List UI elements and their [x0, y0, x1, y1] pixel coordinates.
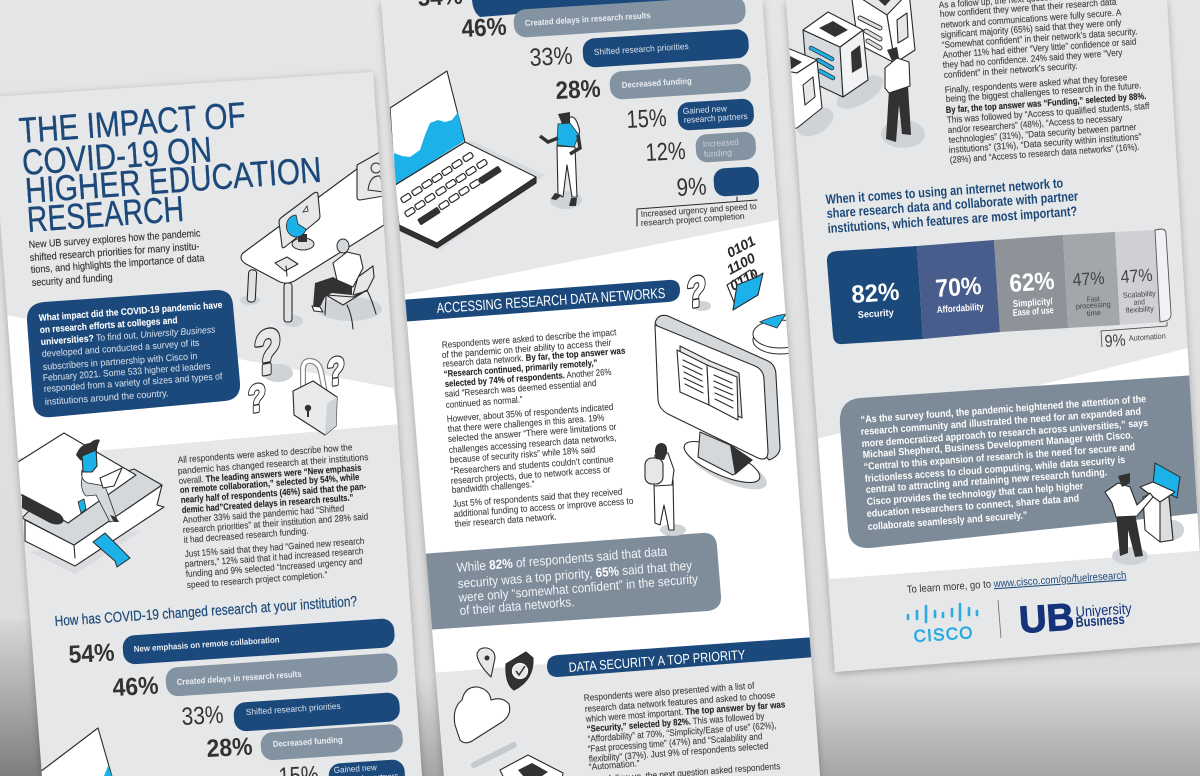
text: follow up and challenges — [938, 0, 1150, 165]
icons: pin, shield, cloud, chip — [454, 648, 563, 776]
text: survey results: demic had”Created delays in research results.” — [181, 492, 354, 515]
intro callout box — [27, 290, 240, 417]
illustration: server boxes and man — [780, 0, 925, 148]
quote panel: Cisco provides the technology that can help higher — [866, 481, 1084, 508]
text: follow up and challenges: Another 11% had either “Very little” confidence or said — [942, 36, 1137, 60]
icon: question marks: ? — [248, 376, 266, 422]
icon: question marks: ? — [254, 315, 281, 390]
stacked bar chart: network features: flexibility — [1126, 304, 1154, 315]
text: survey results: on remote collaboration,” selected by 54%, while — [179, 472, 360, 495]
text: data security body: “Affordability” at 70%, “Simplicity/Ease of use” (62%), — [587, 720, 777, 744]
intro callout box: responded from a variety of sizes and types of — [43, 370, 223, 394]
icon: question marks: ? — [327, 349, 345, 395]
bar chart: research changes: 46% — [112, 672, 159, 702]
panel: page 3 — [780, 0, 1200, 672]
stacked bar chart: network features: Ease of use — [1012, 305, 1054, 319]
text: follow up and challenges: This was followed by “Access to qualified students, staff — [946, 101, 1150, 125]
text: follow up and challenges: confident” in their network’s security. — [943, 61, 1078, 80]
text: survey results: research priorities” at their institution and 28% said — [182, 511, 369, 535]
text: accessing networks body: bandwidth challenges.” — [451, 479, 535, 495]
logo: University Business: University — [1075, 600, 1133, 621]
bar chart continued: research changes: 28% — [555, 75, 601, 105]
illustration: laptop with chart — [390, 71, 545, 250]
stacked bar chart: network features: Security — [857, 307, 895, 321]
logo: University Business: UB — [1018, 596, 1075, 642]
text: survey results: nearly half of respondents (46%) said that the pan- — [180, 481, 367, 505]
quote panel: education researchers to connect, share data and — [866, 493, 1080, 520]
intro callout box: subscribers in partnership with Cisco in — [42, 350, 198, 372]
text: follow up and challenges: technologies” (31%), “Data security between partner — [948, 122, 1137, 145]
subtitle text: tions, and highlights the importance of data — [30, 253, 205, 276]
title: HIGHER EDUCATION — [24, 149, 323, 211]
text: survey results — [177, 442, 369, 590]
text: accessing networks body: Just 5% of respondents said that they received — [452, 487, 623, 509]
text: data security body: “Automation.” — [588, 758, 640, 772]
stacked bar chart: network features: Affordability — [936, 302, 985, 316]
bar chart continued: research changes: funding — [703, 147, 732, 159]
illustration: book with seated woman — [18, 433, 164, 574]
bar chart continued: research changes: Gained new — [682, 103, 728, 116]
quote panel: central to attracting and retaining new research funding. — [865, 467, 1108, 496]
intro callout box: February 2021. Some 533 higher ed leaders — [42, 360, 211, 383]
subtitle text: New UB survey explores how the pandemic — [28, 228, 201, 251]
bar chart continued: research changes: 15% — [626, 104, 667, 134]
stacked bar chart: network features: Simplicity/ — [1012, 296, 1053, 310]
bar chart: research changes: Shifted research priorities — [245, 701, 341, 717]
icon: back server — [851, 0, 915, 63]
quote panel: collaborate seamlessly and securely.” — [867, 510, 1028, 533]
intro callout box: What impact did the COVID-19 pandemic have — [38, 299, 223, 323]
icon: question marks — [248, 327, 344, 414]
quote panel: Michael Shepherd, Business Development Manager with Cisco. — [862, 430, 1134, 461]
callout: data security stat: of their data networks. — [459, 594, 575, 618]
icon: question marks: ? — [248, 376, 266, 422]
text: accessing networks body: However, about 35% of respondents indicated — [446, 402, 614, 424]
intro callout box: on research efforts at colleges and — [39, 314, 178, 335]
stacked bar chart: network features: 47% — [1072, 268, 1105, 290]
icon: question mark — [686, 274, 711, 311]
illustration: desk with seated researcher — [240, 152, 384, 329]
text: survey results: partners,” 12% said that it had increased research — [184, 546, 364, 569]
text: accessing networks body: research projects, due to network access or — [450, 464, 611, 486]
text: accessing networks body: of the pandemic on their ability to access their — [441, 338, 612, 360]
bar chart continued: research changes: 33% — [529, 42, 573, 72]
bar chart continued: research changes: 12% — [645, 137, 686, 167]
text: data security body — [583, 680, 786, 776]
quote panel: frictionless access to cloud computing, while data security is — [864, 455, 1126, 485]
icon: middle server — [803, 12, 868, 97]
text: follow up and challenges: being the biggest challenges to research in the future. — [945, 80, 1142, 104]
bar chart: research changes: Decreased funding — [272, 734, 343, 749]
text: accessing networks body: their research data network. — [454, 512, 557, 529]
bar chart continued: research changes: research partners — [683, 111, 748, 125]
figure: presenting woman — [540, 112, 582, 209]
text: accessing networks body: said “Research was deemed essential and — [444, 378, 597, 399]
stacked bar chart: network features: processing — [1076, 300, 1111, 311]
text: accessing networks body: that there were challenges in this area. 19% — [447, 413, 605, 434]
bar chart continued: research changes: Increased — [702, 137, 739, 149]
text: accessing networks body: Respondents were asked to describe the impact — [441, 327, 617, 350]
text: data security body: Respondents were also presented with a list of — [583, 680, 755, 703]
text: accessing networks body: “Researchers and students couldn’t continue — [450, 454, 614, 476]
text: accessing networks body: because of security risks” while 18% said — [449, 444, 596, 465]
text: data security body: “Fast processing time” (47%) and “Scalability and — [587, 731, 763, 754]
bar chart continued: research changes: research project completion — [640, 211, 745, 228]
icon: shield with check — [506, 652, 533, 690]
panel: page 1 — [0, 72, 422, 776]
icon: binary text with folder — [724, 232, 763, 310]
text: accessing networks body: selected by 74% of respondents. Another 26% — [444, 367, 612, 389]
chart heading: institutions, which features are most important? — [827, 204, 1078, 236]
section heading: data security — [547, 637, 815, 677]
stacked bar chart: network features: Automation — [1129, 331, 1166, 343]
text: data security body: “Security,” selected by 82%. This was followed by — [586, 711, 765, 734]
icon: question marks: ? — [254, 315, 281, 390]
stacked bar chart: network features — [827, 229, 1171, 351]
text: accessing networks body: selected the answer “There were limitations or — [447, 422, 617, 444]
text: survey results: Another 33% said the pandemic had “Shifted — [182, 503, 345, 525]
bar chart continued: research changes: Increased urgency and speed to — [640, 201, 757, 219]
text: accessing networks body: continued as normal.” — [445, 394, 523, 410]
stacked bar chart: network features: Scalability — [1123, 289, 1156, 300]
icon: cloud — [454, 687, 510, 743]
icon: binary text with folder: 1100 — [724, 249, 758, 278]
text: accessing networks body — [441, 327, 634, 529]
illustration: laptop corner — [42, 727, 112, 776]
icon: second monitor — [357, 152, 384, 200]
panel: page 2 — [375, 0, 830, 776]
bar chart: research changes: Gained new — [333, 762, 378, 775]
subtitle text: shifted research priorities for many institu- — [29, 241, 200, 264]
subtitle text — [28, 228, 205, 289]
bar chart: research changes: Created delays in research results — [176, 669, 302, 687]
quote panel: more democratized approach to research across universities,” says — [861, 418, 1149, 450]
logo: Cisco — [908, 604, 977, 646]
illustration: large monitor with book — [655, 315, 780, 498]
logo: University Business: Business — [1075, 611, 1125, 630]
text: survey results: All respondents were asked to describe how the — [177, 442, 353, 465]
icon: binary text with folder: 0101 — [724, 232, 758, 261]
chart heading: share research data and collaborate with partner — [826, 188, 1079, 221]
text: follow up and challenges: significant majority (65%) said that they were only — [940, 17, 1122, 40]
icon: pie chart — [752, 314, 788, 354]
text: follow up and challenges: institutions” (31%), “Data security within institutions” — [948, 132, 1142, 155]
text: survey results: it had decreased research funding. — [183, 526, 309, 545]
icon: question marks: ? — [327, 349, 345, 395]
footer call to action: To learn more, go to www.cisco.com/go/fuelresearch — [906, 569, 1127, 596]
figure: woman with laptop — [76, 439, 122, 522]
text: survey results: funding and 9% selected “Increased urgency and — [185, 556, 363, 579]
icon: question mark: ? — [687, 266, 706, 317]
bar chart: research changes: New emphasis on remote collaboration — [133, 634, 280, 654]
text: accessing networks body: additional funding to access or improve access to — [453, 496, 634, 519]
text: follow up and challenges: (28%) and “Access to research data networks” (16%). — [949, 142, 1140, 165]
text: survey results: speed to research project completion.” — [186, 570, 328, 590]
stacked bar chart: network features: 62% — [1008, 267, 1055, 298]
bar chart continued: research changes: 9% — [676, 172, 707, 202]
quote panel: research community and illustrated the need for an expanded and — [860, 406, 1141, 438]
icon: map pin — [477, 648, 495, 677]
bar chart: research changes — [68, 618, 406, 776]
icon: chip — [500, 755, 563, 776]
text: accessing networks body: research data network. By far, the top answer was — [442, 346, 626, 369]
bar chart: research changes: 33% — [181, 701, 224, 731]
intro callout box: institutions around the country. — [44, 387, 169, 407]
text: survey results: pandemic has changed research at their institutions — [177, 452, 369, 476]
section heading: data security: DATA SECURITY A TOP PRIORITY — [568, 647, 746, 675]
title: THE IMPACT OF — [18, 94, 247, 151]
icon: binary text with folder: 0110 — [727, 265, 761, 294]
text: accessing networks body: challenges accessing research data networks, — [448, 433, 617, 455]
bar chart continued: research changes: Shifted research priorities — [593, 41, 689, 57]
title — [18, 102, 320, 232]
bar chart continued: research changes: Decreased funding — [621, 76, 692, 90]
text: follow up and challenges: and/or researchers” (48%), “Access to necessary — [947, 113, 1123, 135]
quote panel — [840, 374, 1200, 548]
icon: front server — [790, 48, 822, 129]
text: data security body: research data network features and asked to choose — [584, 690, 776, 714]
text: follow up and challenges: By far, the top answer was “Funding,” selected by 88%. — [945, 91, 1147, 115]
stacked bar chart: network features: 9% — [1104, 331, 1126, 351]
text: data security body: which were most important. The top answer by far was — [585, 699, 786, 724]
quote panel: “Central to this expansion of research is the need for secure and — [863, 442, 1135, 473]
figure: woman with backpack — [645, 443, 686, 536]
stacked bar chart: network features: 47% — [1120, 265, 1153, 287]
chart heading: When it comes to using an internet network to — [825, 175, 1064, 207]
bar chart continued: research changes: Created delays in research results — [524, 10, 651, 28]
bar chart continued: research changes: 46% — [461, 13, 507, 43]
figure: standing man — [885, 47, 911, 142]
callout: data security stat: were only “somewhat confident” in the security — [457, 571, 699, 605]
text: survey results: overall. The leading answers were “New emphasis — [178, 463, 362, 486]
intro callout box: universities? To find out, University Business — [40, 323, 216, 347]
text: survey results: Just 15% said that they had “Gained new research — [184, 536, 365, 559]
logo: University Business — [1018, 596, 1133, 642]
chart heading — [825, 175, 1079, 236]
subtitle text: security and funding — [31, 272, 113, 289]
stacked bar chart: network features: 70% — [934, 272, 982, 303]
bar chart: research changes: 28% — [206, 733, 253, 763]
chart heading: How has COVID-19 changed research at your institution? — [54, 594, 358, 630]
icon: ribbon bookmark — [93, 533, 130, 567]
stacked bar chart: network features: Fast — [1087, 294, 1101, 304]
section heading: accessing research data networks — [400, 280, 680, 322]
text: follow up and challenges: Finally, respondents were asked what they foresee — [944, 72, 1128, 95]
bar chart continued: research changes — [417, 0, 760, 228]
stacked bar chart: network features: and — [1134, 297, 1145, 307]
icon: monitor with pie chart — [279, 192, 320, 250]
stacked bar chart: network features: 82% — [850, 278, 900, 309]
text: follow up and challenges: they had no confidence. 24% said they were “Very — [942, 47, 1123, 70]
callout: data security stat: While 82% of respondents said that data — [456, 543, 668, 575]
intro callout box: developed and conducted a survey of its — [41, 337, 200, 359]
title: COVID-19 ON — [21, 128, 213, 183]
stacked bar chart: network features: time — [1087, 308, 1101, 318]
bar chart: research changes: 54% — [68, 639, 115, 669]
callout: data security stat: security was a top priority, 65% said that they — [457, 558, 693, 591]
figure: man at laptop podium — [1105, 463, 1184, 565]
text: accessing networks body: “Research continued, primarily remotely,” — [443, 358, 598, 379]
text: follow up and challenges: “Somewhat confident” in their network’s data security. — [941, 26, 1138, 50]
text: follow up and challenges: network and communications were fully secure. A — [940, 7, 1122, 30]
title: RESEARCH — [26, 188, 185, 240]
text: data security body: flexibility” (37%). Just 9% of respondents selected — [588, 741, 769, 764]
callout: data security stat — [420, 533, 721, 630]
icon: question mark: ? — [687, 266, 706, 317]
icon: padlock — [293, 361, 337, 435]
quote panel: “As the survey found, the pandemic heightened the attention of the — [860, 394, 1147, 426]
section heading: accessing research data networks: ACCESSING RESEARCH DATA NETWORKS — [436, 286, 666, 317]
logo: Cisco: CISCO — [913, 623, 973, 646]
